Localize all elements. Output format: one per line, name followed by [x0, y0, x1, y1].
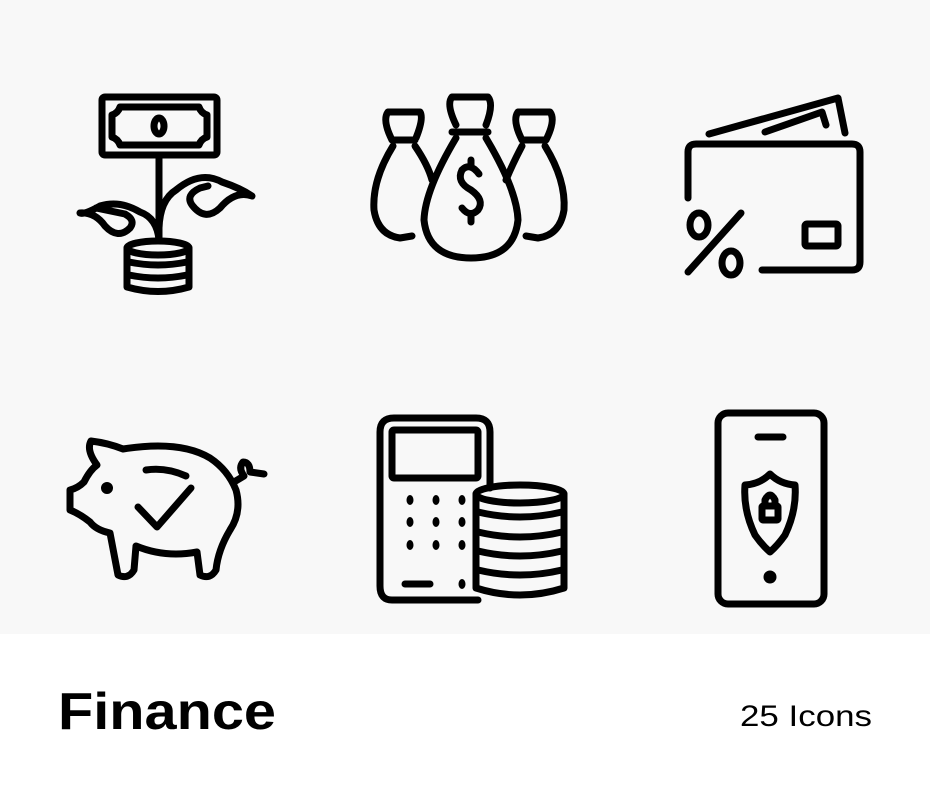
icon: calculator and coins [380, 418, 564, 600]
icon: money bags [374, 97, 564, 258]
title: Finance [58, 683, 276, 741]
icon count: 25 Icons [740, 700, 872, 733]
icon: money plant [80, 97, 252, 292]
icon: secure phone [718, 413, 824, 604]
icon: wallet with percent [688, 98, 860, 275]
icon: piggy bank with check [70, 441, 264, 577]
